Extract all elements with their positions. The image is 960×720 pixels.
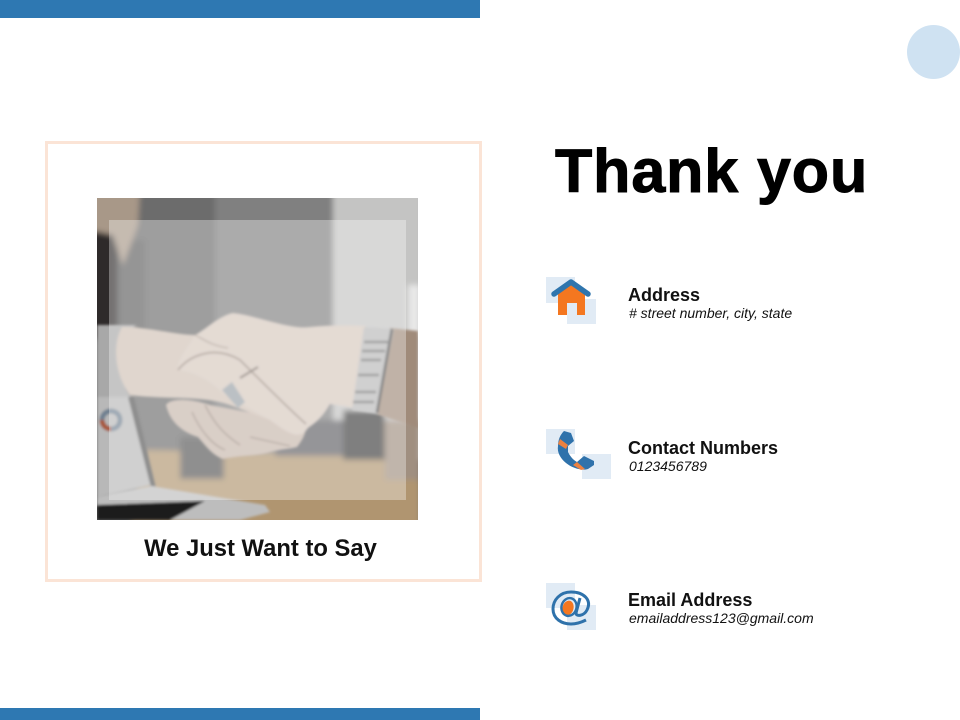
- icon: at sign: [546, 583, 596, 630]
- top bar: [0, 0, 480, 18]
- panel: photo frame: [45, 141, 482, 582]
- right hand: [178, 313, 366, 435]
- address detail: # street number, city, state: [629, 305, 792, 321]
- contact: email: [546, 583, 814, 630]
- bottom bar: [0, 708, 480, 720]
- lower fingers: [166, 400, 307, 459]
- left hand: [116, 327, 270, 420]
- email detail: emailaddress123@gmail.com: [629, 610, 814, 626]
- contact: phone: [546, 429, 778, 479]
- contact numbers heading: Contact Numbers: [628, 438, 778, 458]
- translucent overlay: [109, 220, 406, 500]
- email heading: Email Address: [628, 590, 752, 610]
- photo caption: We Just Want to Say: [144, 535, 377, 562]
- right arm: [376, 328, 418, 428]
- icon: house: [546, 277, 596, 324]
- sleeve: [97, 325, 137, 397]
- decorative circle: [907, 25, 960, 79]
- contact: address: [546, 277, 792, 324]
- laptop: [97, 397, 151, 497]
- watch: [352, 327, 394, 414]
- phone number: 0123456789: [629, 458, 707, 474]
- address heading: Address: [628, 285, 700, 305]
- photo: handshake: [97, 198, 418, 520]
- title: Thank you: [555, 137, 868, 205]
- icon: telephone: [546, 429, 611, 479]
- creases: [178, 353, 306, 424]
